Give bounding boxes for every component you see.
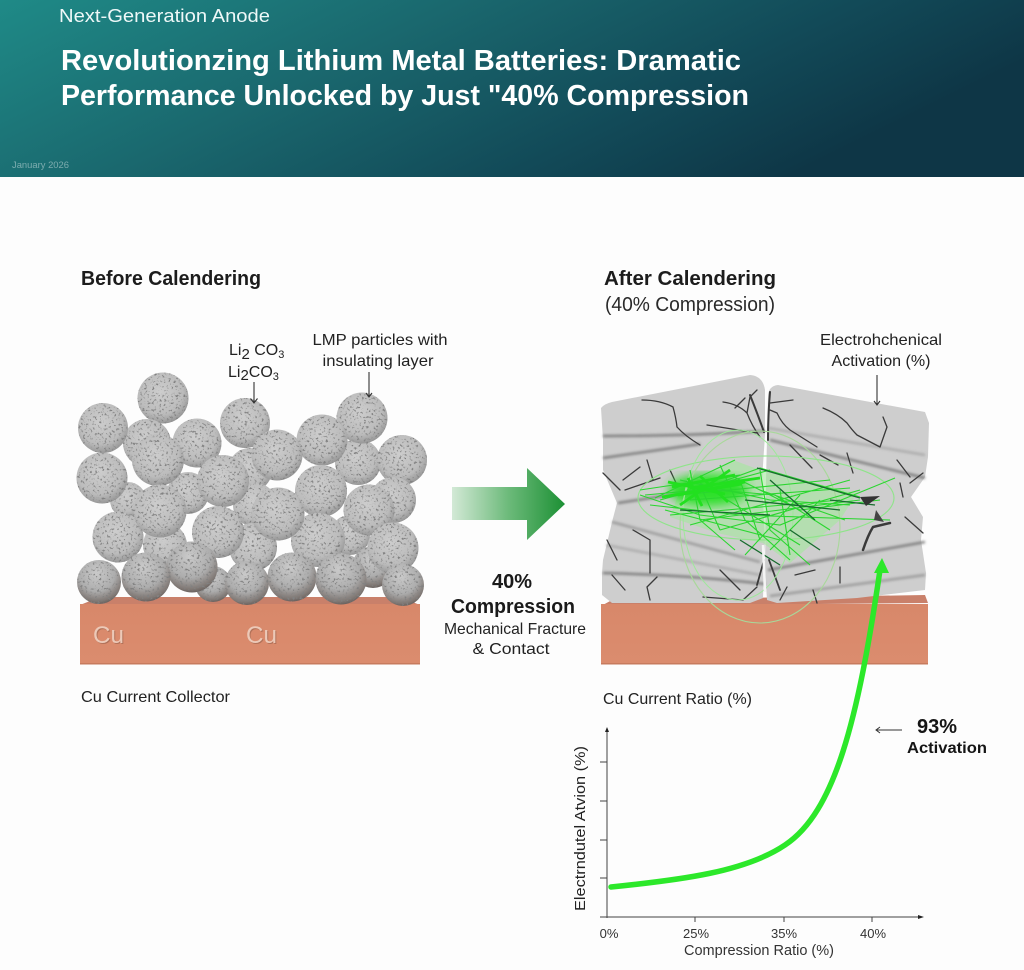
label: electrochemical activation: Activation (%) xyxy=(832,353,930,370)
eyebrow label: Next-Generation Anode xyxy=(59,6,270,26)
callout: 93% activation: 93% xyxy=(917,716,957,738)
title: Revolutionzing Lithium Metal Batteries: Dramatic xyxy=(61,45,741,77)
compression caption: Mechanical Fracture xyxy=(444,621,586,638)
label: Li2CO3 xyxy=(228,342,284,384)
copper current collector: Cu xyxy=(246,622,277,649)
arrows to particles xyxy=(250,372,372,403)
compression caption xyxy=(444,571,586,658)
y axis label: Electrndutel Atvion (%) xyxy=(572,746,589,911)
label: LMP particles xyxy=(312,332,448,370)
label: Cu current collector: Cu Current Collector xyxy=(81,689,231,706)
axes xyxy=(600,731,920,922)
activation curve arrow xyxy=(611,558,889,887)
chart: activation vs compression xyxy=(572,691,987,959)
x tick labels: 25% xyxy=(683,926,709,941)
heading: after: After Calendering xyxy=(604,268,776,290)
label: Li2CO3: 3 xyxy=(278,349,284,361)
copper current collector xyxy=(601,595,928,664)
label: Li2CO3: 2 xyxy=(241,346,250,363)
label: Li2CO3: CO xyxy=(249,364,273,381)
label: electrochemical activation: Electrohchenical xyxy=(820,332,942,349)
label: LMP particles: insulating layer xyxy=(322,353,434,370)
central fracture glint xyxy=(763,545,765,592)
conductive network xyxy=(638,430,895,623)
label: LMP particles: LMP particles with xyxy=(312,332,448,349)
title xyxy=(61,45,749,112)
title: Performance Unlocked by Just "40% Compression xyxy=(61,80,749,112)
callout: 93% activation: Activation xyxy=(907,740,987,757)
heading: before: Before Calendering xyxy=(81,268,261,290)
x tick labels: 0% xyxy=(600,926,619,941)
LMP particles xyxy=(76,372,427,606)
compression arrow xyxy=(452,468,565,540)
date: January 2026 xyxy=(12,160,69,171)
callout: 93% activation xyxy=(876,716,987,757)
panel: before calendering xyxy=(76,268,448,706)
copper current collector xyxy=(80,597,420,664)
copper current collector: Cu xyxy=(94,623,125,650)
label: Li2CO3: 3 xyxy=(273,371,279,383)
label: Li2CO3: Li xyxy=(229,342,241,359)
fractured compressed slabs xyxy=(601,375,929,623)
subheading: compression: (40% Compression) xyxy=(605,294,775,316)
x tick labels xyxy=(600,926,886,941)
compression caption: Compression xyxy=(451,596,575,618)
label: Li2CO3: CO xyxy=(250,342,278,359)
label: electrochemical activation xyxy=(820,332,942,370)
cracks xyxy=(603,390,923,603)
copper current collector: Cu xyxy=(247,623,278,650)
label: Li2CO3: 2 xyxy=(240,367,249,384)
compression caption: 40% xyxy=(492,571,532,593)
chart heading: Cu Current Ratio (%) xyxy=(603,691,752,708)
copper current collector: Cu xyxy=(93,622,124,649)
header banner xyxy=(0,0,1024,177)
x tick labels: 35% xyxy=(771,926,797,941)
slab shading xyxy=(603,428,925,596)
panel: after calendering xyxy=(572,268,987,959)
label: Li2CO3: Li xyxy=(228,364,240,381)
arrow to slab xyxy=(874,375,880,405)
compression caption: & Contact xyxy=(472,641,550,658)
activation glow xyxy=(670,460,857,563)
x axis label: Compression Ratio (%) xyxy=(684,942,834,959)
x tick labels: 40% xyxy=(860,926,886,941)
